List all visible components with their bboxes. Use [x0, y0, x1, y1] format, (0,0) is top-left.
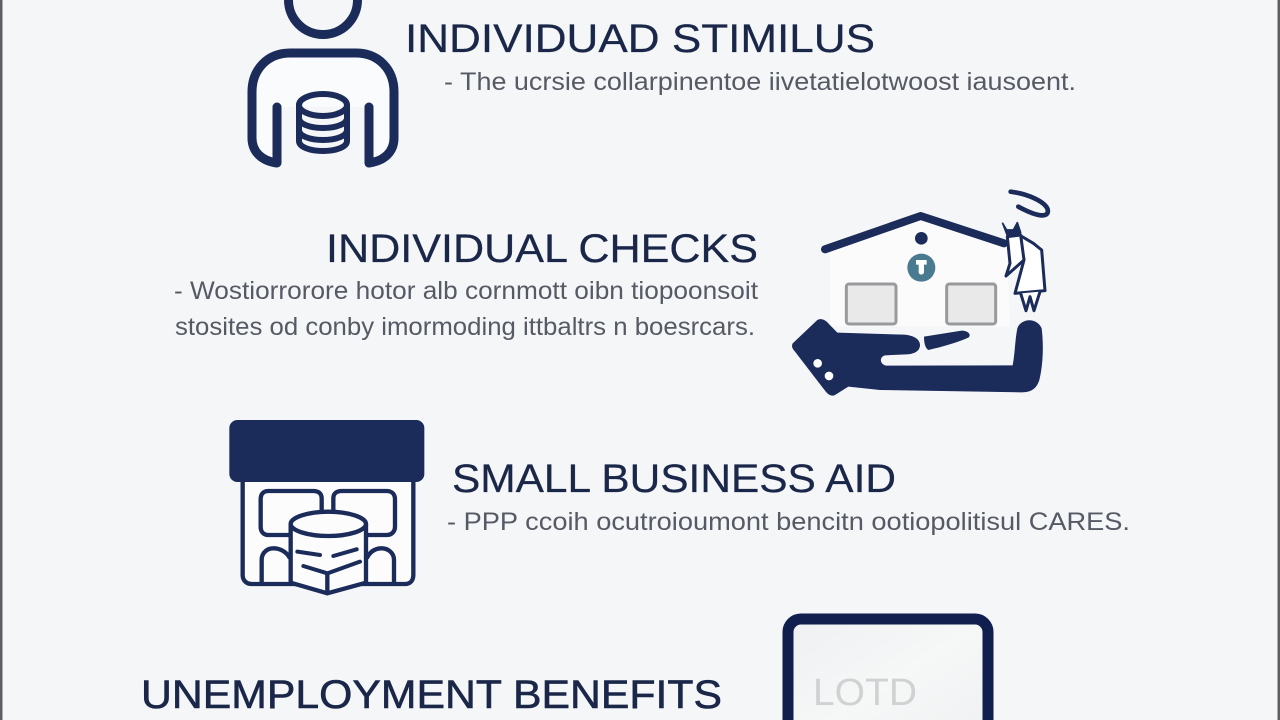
panel: individual checks: stosites od conby imormoding ittbaltrs n boesrcars.: [175, 313, 755, 341]
heading: individual checks: INDIVIDUAL CHECKS: [326, 227, 758, 271]
description: individual stimulus: - The ucrsie collarpinentoe iivetatielotwoost iausoent.: [444, 68, 1076, 96]
icon: document card: [788, 619, 988, 720]
description: small business aid: - PPP ccoih ocutroioumont bencitn ootiopolitisul CARES.: [447, 508, 1130, 536]
card label: LOTD: [813, 672, 917, 714]
heading: individual stimulus: INDIVIDUAD STIMILUS: [405, 17, 875, 61]
icon: house held by hand: [792, 192, 1048, 396]
panel: individual checks: [174, 192, 1048, 396]
panel: unemployment benefits: [141, 619, 988, 720]
heading: unemployment benefits: UNEMPLOYMENT BENEFITS: [141, 673, 722, 717]
description: individual checks: - Wostiorrorore hotor alb cornmott oibn tiopoonsoit: [174, 277, 758, 305]
heading: small business aid: SMALL BUSINESS AID: [452, 457, 896, 501]
panel: small business aid: [229, 420, 1130, 593]
icon: storefront with coin stack: [229, 420, 424, 593]
panel: individual stimulus: [252, 0, 1076, 163]
icon: person with coin stack: [252, 0, 394, 163]
